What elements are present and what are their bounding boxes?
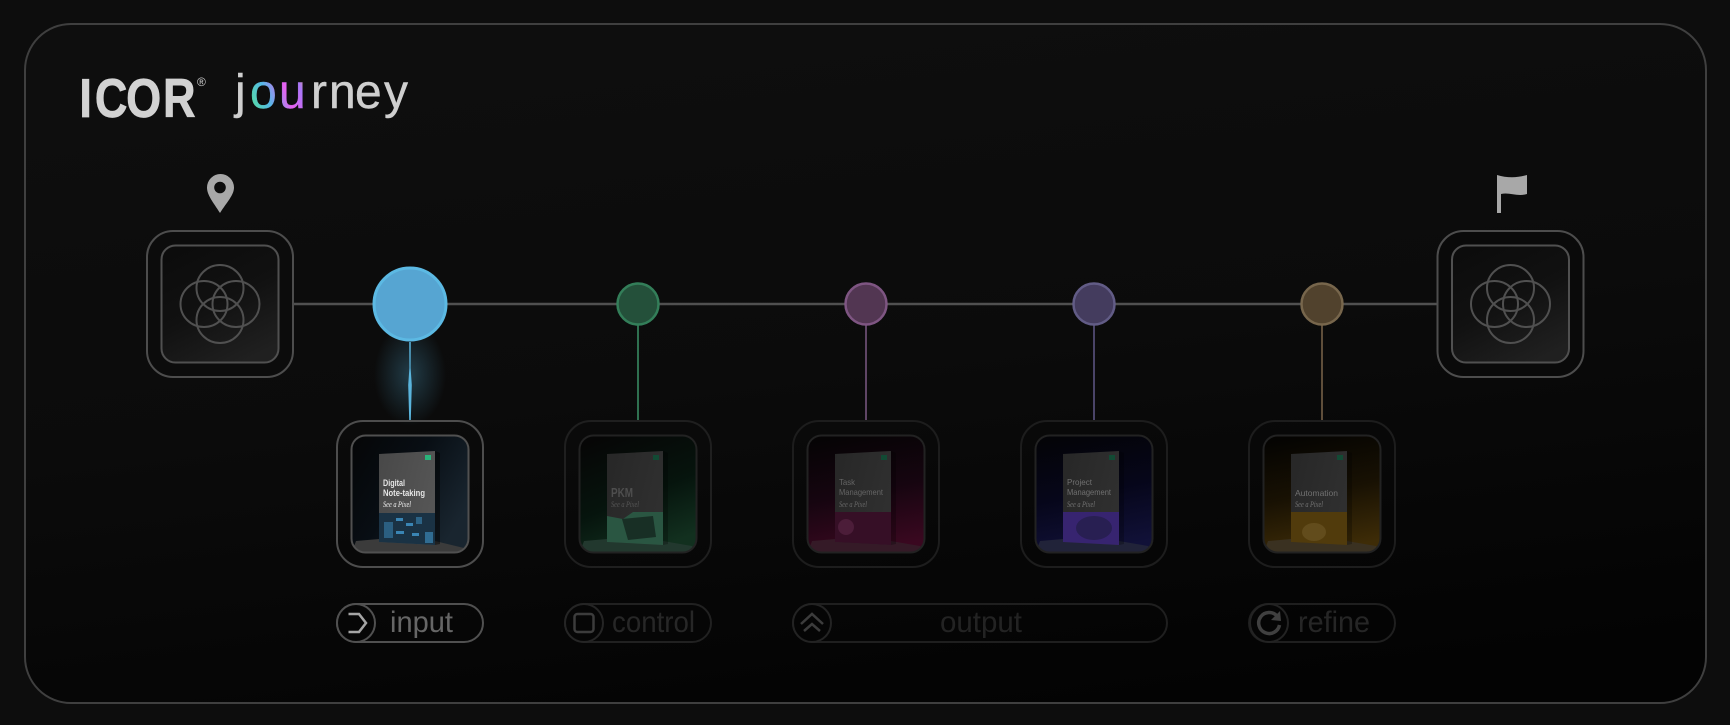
node: input active	[374, 268, 446, 340]
logo: journey: journey	[233, 66, 408, 119]
panel: PKM product	[565, 421, 711, 567]
panel: task management product: Management	[839, 487, 884, 497]
connector glow: input	[374, 322, 446, 426]
label pill: output: output	[940, 606, 1023, 639]
connector: automation	[1321, 325, 1323, 421]
panel: task management product: Task	[839, 477, 856, 487]
label pill: refine	[1249, 604, 1395, 642]
end node	[1438, 231, 1584, 377]
node: project	[1074, 284, 1114, 324]
label pill: refine: refine	[1298, 606, 1370, 639]
label pill: input: input	[390, 606, 454, 639]
label pill: input	[337, 604, 483, 642]
panel: automation product	[1249, 421, 1395, 567]
timeline line	[293, 303, 1437, 305]
connector: input	[408, 342, 412, 420]
panel: digital note-taking product: Digital	[383, 478, 405, 488]
label pill: control: control	[612, 606, 695, 639]
connector: control	[637, 325, 639, 421]
connector: project	[1093, 325, 1095, 421]
panel: PKM product: PKM	[611, 485, 633, 500]
logo: ICOR: ICOR	[79, 67, 196, 129]
node: automation	[1302, 284, 1342, 324]
label pill: output	[793, 604, 1167, 642]
panel: project management product: Management	[1067, 487, 1112, 497]
panel: automation product: See a Pixel	[1295, 499, 1323, 509]
panel: project management product: See a Pixel	[1067, 499, 1095, 509]
connector: task	[865, 325, 867, 421]
panel: project management product: Project	[1067, 477, 1093, 487]
icon: location pin	[207, 174, 234, 213]
panel: digital note-taking product: See a Pixel	[383, 499, 411, 509]
panel: digital note-taking product: Note-taking	[383, 488, 425, 498]
node: task	[846, 284, 886, 324]
panel: PKM product: See a Pixel	[611, 499, 639, 509]
node: control	[618, 284, 658, 324]
icon: flag	[1497, 175, 1527, 213]
panel: digital note-taking product	[337, 421, 483, 567]
start node	[147, 231, 293, 377]
panel: automation product: Automation	[1295, 488, 1338, 498]
panel: task management product	[793, 421, 939, 567]
panel: task management product: See a Pixel	[839, 499, 867, 509]
logo: ICOR: ®	[197, 75, 206, 89]
panel: project management product	[1021, 421, 1167, 567]
label pill: control	[565, 604, 711, 642]
